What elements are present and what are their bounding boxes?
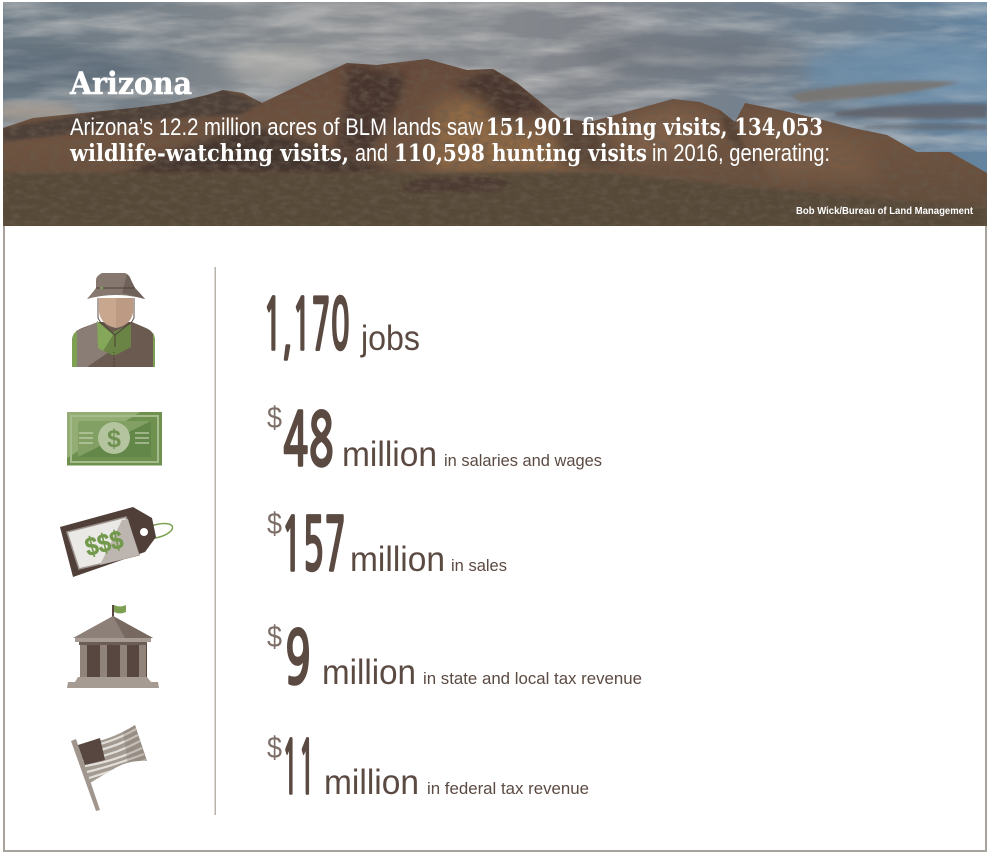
intro text: Arizona’s 12.2 million acres of BLM lands saw	[70, 114, 484, 141]
left hills in shadow	[3, 90, 262, 142]
stat: federal tax revenue: $	[267, 730, 282, 765]
stat: federal tax revenue: million	[324, 763, 419, 802]
icon: government building	[67, 605, 159, 688]
stat: salaries and wages: in salaries and wages	[444, 451, 602, 470]
header text block	[69, 66, 974, 217]
stat: state and local tax revenue: 9	[285, 623, 311, 696]
intro text: and	[355, 140, 388, 167]
title: Arizona	[69, 66, 192, 102]
stat: salaries and wages: $	[267, 400, 282, 435]
divider	[214, 267, 216, 815]
header photo: desert mountain	[0, 2, 990, 226]
stat: sales	[267, 506, 507, 583]
stat: federal tax revenue	[267, 730, 589, 806]
intro text: in 2016, generating:	[652, 140, 830, 167]
icon: price tag: $$$	[82, 524, 127, 562]
stat: state and local tax revenue	[267, 619, 642, 696]
intro text	[69, 114, 830, 167]
intro text: wildlife-watching visits,	[69, 140, 349, 167]
intro text: 151,901 fishing visits, 134,053	[486, 114, 823, 141]
icon: American flag	[71, 725, 147, 811]
main peak light and shade	[335, 65, 405, 155]
stat: state and local tax revenue: in state and local tax revenue	[423, 669, 642, 688]
stat: jobs: jobs	[360, 319, 420, 358]
foreground desert flats	[3, 172, 987, 226]
stat: federal tax revenue: in federal tax revenue	[427, 779, 589, 798]
stat: sales: $	[267, 506, 282, 541]
icon: price tag	[60, 507, 174, 577]
stat: jobs: 1,170	[263, 290, 350, 361]
icon: dollar bill: $	[107, 425, 121, 453]
stat: sales: million	[350, 540, 445, 579]
icon: person in hat	[72, 273, 155, 367]
stat: state and local tax revenue: million	[322, 653, 416, 692]
photo credit: Bob Wick/Bureau of Land Management	[796, 206, 974, 217]
stat: state and local tax revenue: $	[267, 619, 282, 654]
stat: federal tax revenue: 11	[282, 733, 315, 806]
stat: salaries and wages: million	[342, 435, 437, 474]
stat: salaries and wages	[267, 400, 602, 478]
icon: dollar bill	[67, 412, 162, 466]
stat: sales: in sales	[451, 556, 507, 575]
stat: salaries and wages: 48	[283, 405, 334, 478]
intro text: 110,598 hunting visits	[394, 140, 647, 167]
stat: sales: 157	[281, 510, 346, 583]
